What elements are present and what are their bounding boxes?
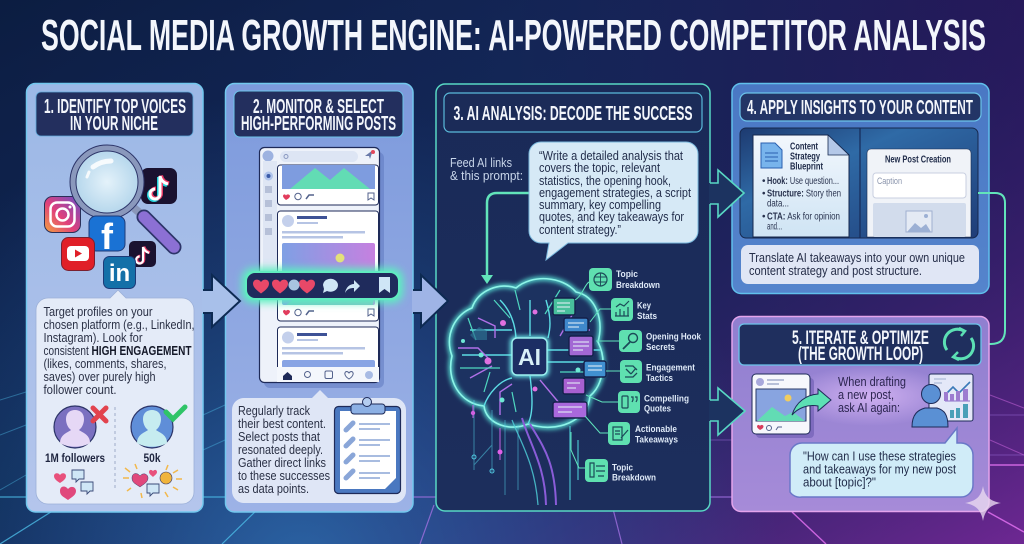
icon: tiktok small (129, 241, 156, 267)
prompt bubble: ask again (790, 428, 973, 497)
prompt bubble (529, 142, 698, 260)
feature: actionable takeaways (608, 422, 678, 446)
feature: key stats: Key (637, 300, 652, 312)
icon: magnifying glass handle (134, 208, 174, 247)
feature: topic breakdown lower: Topic (612, 462, 633, 474)
content strategy blueprint document: Hook: Use question... (767, 176, 839, 187)
feature: topic breakdown lower (585, 459, 656, 484)
phone feed mockup (260, 148, 384, 388)
ai brain illustration (449, 279, 606, 505)
prompt bubble: summary, key compelling (539, 198, 661, 212)
content strategy blueprint document: • (762, 176, 766, 187)
prompt bubble: covers the topic, relevant (539, 161, 660, 175)
text block: targeting advice: (likes, comments, shares, (44, 356, 166, 371)
heading 5: (THE GROWTH LOOP) (798, 344, 923, 365)
feature: actionable takeaways: Actionable (635, 424, 677, 435)
arrow: prompt to brain (481, 193, 529, 284)
text block: translate takeaways: content strategy and post structure. (749, 263, 922, 278)
avatar: 1M followers rejected (45, 406, 106, 465)
arrow: step 3 to 5 (709, 388, 745, 435)
feature: compelling quotes: Compelling (644, 394, 689, 404)
data cards (553, 298, 606, 418)
bottom navigation (277, 367, 379, 382)
icon: person with analytics chart (912, 374, 973, 427)
text block: translate takeaways (741, 245, 979, 284)
panel 3: ai analysis (436, 84, 710, 511)
icon: linkedin: in (109, 260, 130, 287)
icon: sparkle (965, 486, 1001, 521)
text block: targeting advice: chosen platform (e.g., LinkedIn, (44, 317, 194, 332)
prompt bubble: engagement strategies, a script (539, 186, 691, 200)
text block: when drafting: a new post, (838, 387, 894, 402)
prompt bubble: ask again: about [topic]?" (803, 476, 876, 490)
content strategy blueprint document (753, 135, 849, 237)
post card bottom (278, 327, 378, 372)
feature: opening hook secrets: Secrets (646, 342, 675, 353)
text block: translate takeaways: Translate AI takeaways into your own unique (749, 250, 965, 265)
new post creation card (867, 149, 971, 237)
prompt bubble: “Write a detailed analysis that (539, 149, 683, 163)
text block: targeting advice (36, 290, 194, 504)
arrow: step 2 to 3 (412, 275, 448, 327)
feature: topic breakdown: Breakdown (616, 280, 660, 291)
text block: targeting advice: follower count. (44, 382, 116, 397)
prompt bubble: quotes, and key takeaways for (539, 210, 684, 224)
avatar: 1M followers rejected: 1M followers (45, 451, 105, 465)
icon: magnifying glass lens (70, 145, 144, 219)
feature: key stats (611, 298, 657, 322)
text block: tracking advice: resonated deeply. (238, 442, 323, 457)
feature: engagement tactics: Engagement (646, 362, 696, 374)
feature: topic breakdown lower: Breakdown (612, 472, 656, 484)
feature: topic breakdown (589, 268, 660, 291)
icon: refresh loop (944, 328, 974, 360)
panel 1: identify top voices (26, 84, 203, 512)
text block: when drafting: ask AI again: (838, 400, 900, 415)
illustration panel (740, 128, 978, 238)
text block: tracking advice: Select posts that (238, 429, 320, 444)
post card top (278, 165, 378, 205)
feature: opening hook secrets (619, 330, 702, 353)
text block: targeting advice: saves) over purely high (44, 369, 156, 384)
content strategy blueprint document: • (762, 188, 766, 200)
avatar: 50k followers approved: 50k (144, 451, 161, 465)
text block: targeting advice: Instagram). Look for (44, 330, 143, 345)
arrow: step 1 to 2 (202, 275, 240, 327)
heading 1: 1. IDENTIFY TOP VOICES (44, 96, 186, 118)
content strategy blueprint document: Blueprint (790, 162, 824, 172)
prompt bubble: ask again: and takeaways for my new post (803, 462, 956, 476)
prompt bubble: statistics, the opening hook, (539, 174, 671, 188)
text block: targeting advice: Target profiles on your (44, 304, 153, 319)
feature: compelling quotes: Quotes (644, 404, 671, 414)
heading 3 (444, 93, 702, 132)
feature: opening hook secrets: Opening Hook (646, 332, 702, 342)
heading 1 (36, 92, 193, 136)
panel 4: apply insights (732, 84, 989, 294)
feature: engagement tactics: Tactics (646, 373, 673, 384)
arrow: post to AI (792, 389, 831, 415)
feature: topic breakdown: Topic (616, 269, 638, 280)
arrow: step 3 to 4 (709, 170, 744, 217)
prompt bubble: content strategy.” (539, 223, 621, 237)
feature: engagement tactics (620, 360, 696, 384)
post card highlighted (278, 211, 378, 321)
heading 5: 5. ITERATE & OPTIMIZE (792, 328, 929, 349)
label: feed ai: Feed AI links (450, 156, 512, 170)
icon: facebook (89, 216, 125, 257)
content strategy blueprint document: and... (767, 222, 782, 232)
new post creation card: New Post Creation (885, 154, 951, 166)
prompt bubble: ask again: "How can I use these strategies (803, 450, 956, 464)
new post creation card: Caption (877, 176, 902, 186)
text block: tracking advice: their best content. (238, 416, 326, 431)
heading 2: HIGH-PERFORMING POSTS (241, 113, 396, 135)
label: feed ai (450, 156, 523, 183)
growth loop connector (978, 193, 1005, 344)
content strategy blueprint document: Structure: Story then (767, 188, 841, 200)
reaction bar (242, 268, 403, 303)
ai chip: AI (518, 344, 541, 370)
connector lines (571, 282, 620, 468)
icon: small engagement (54, 470, 93, 500)
heading 5 (739, 324, 981, 365)
content strategy blueprint document: data... (767, 198, 789, 210)
panel 2: monitor and select (226, 84, 413, 512)
icon: large engagement burst (123, 464, 182, 498)
text block: targeting advice: consistent HIGH ENGAGEMENT (44, 343, 192, 358)
text block: tracking advice: Regularly track (238, 403, 310, 418)
icon: instagram (44, 196, 80, 232)
heading 2: 2. MONITOR & SELECT (253, 96, 384, 118)
heading 2 (234, 91, 403, 137)
content strategy blueprint document: • (762, 212, 766, 222)
icon: youtube (62, 238, 94, 270)
heading 3: 3. AI ANALYSIS: DECODE THE SUCCESS (454, 103, 692, 125)
content strategy blueprint document: Strategy (790, 152, 820, 162)
ai chip (510, 336, 549, 377)
text block: tracking advice: as data points. (238, 481, 309, 496)
stem and circuit traces (471, 400, 578, 505)
heading 4 (740, 93, 981, 121)
post preview card (752, 374, 814, 438)
text block: tracking advice (232, 390, 406, 503)
text block: when drafting (838, 374, 906, 415)
icon: clipboard of links (334, 398, 400, 494)
text block: tracking advice: Gather direct links (238, 455, 326, 470)
label: feed ai: & this prompt: (450, 169, 523, 183)
panel 5: iterate and optimize (732, 316, 989, 512)
icon: linkedin (104, 256, 136, 288)
icon: tiktok (141, 168, 177, 204)
content strategy blueprint document: Content (790, 142, 818, 152)
heading 1: IN YOUR NICHE (70, 113, 158, 135)
feature: compelling quotes (618, 391, 689, 414)
feature: actionable takeaways: Takeaways (635, 434, 678, 446)
avatar: 50k followers approved (131, 406, 185, 465)
icon: facebook: f (101, 216, 114, 257)
feature: key stats: Stats (637, 311, 657, 322)
text block: tracking advice: to these successes (238, 468, 330, 483)
content strategy blueprint document: CTA: Ask for opinion (767, 212, 840, 222)
text block: when drafting: When drafting (838, 374, 906, 389)
